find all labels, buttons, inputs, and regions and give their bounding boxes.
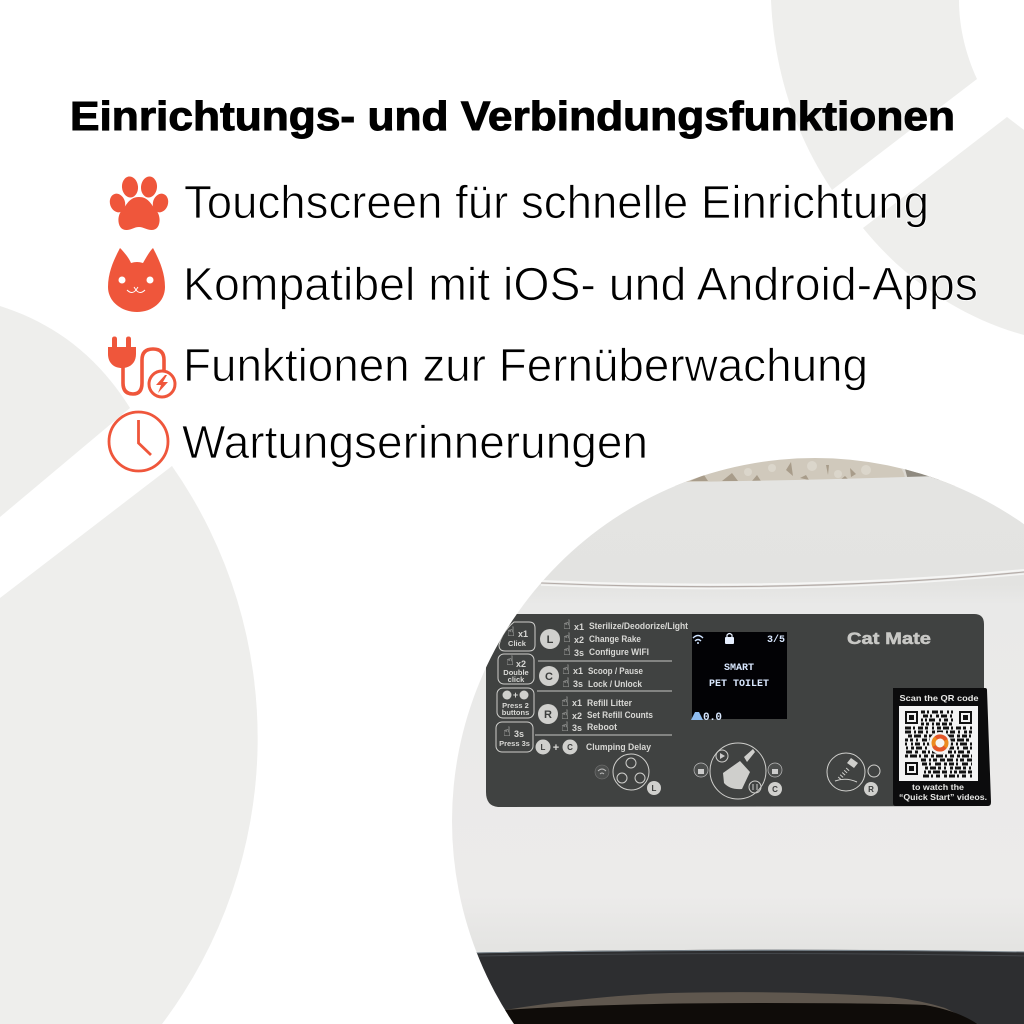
clumping delay row: Clumping Delay	[586, 742, 651, 752]
QR code sticker: to watch the	[912, 782, 964, 792]
button L instructions: L	[547, 634, 554, 646]
button L instructions: ☝	[563, 644, 571, 659]
button R instructions: ☝	[561, 720, 569, 735]
clumping delay row: C	[567, 743, 573, 752]
QR finder squares	[906, 712, 971, 774]
button R instructions: Refill Litter	[587, 698, 632, 708]
mode legend boxes: 3s	[514, 729, 524, 739]
background shape: upper right ring top	[771, 0, 977, 190]
background shape: upper right ring bottom	[863, 117, 1024, 335]
icon: cat face	[108, 248, 165, 312]
mode legend boxes: Press 2	[502, 701, 529, 710]
mode legend boxes: x1	[518, 629, 528, 639]
brand logo: Cat Mate	[847, 629, 931, 648]
right dial icons	[827, 753, 880, 796]
mode legend boxes: Click	[508, 639, 527, 648]
button C instructions: Lock / Unlock	[588, 679, 643, 689]
QR code sticker	[893, 688, 991, 806]
button L instructions: x2	[574, 635, 584, 645]
button R instructions	[538, 696, 653, 731]
LCD screen: SMART	[724, 663, 754, 674]
QR code sticker: “Quick Start” videos.	[899, 792, 987, 802]
clumping delay row: L	[541, 743, 546, 752]
button L instructions: 3s	[574, 648, 584, 658]
button L instructions: Change Rake	[589, 634, 641, 644]
button L instructions: Configure WIFI	[589, 647, 649, 657]
LCD screen	[691, 632, 787, 724]
button R instructions: ☝	[561, 708, 569, 723]
left dial icons: L	[652, 784, 657, 793]
control panel	[486, 614, 991, 807]
button L instructions: ☝	[563, 631, 571, 646]
button L instructions: ☝	[563, 618, 571, 633]
center dial icons	[694, 743, 782, 799]
button L instructions: x1	[574, 622, 584, 632]
mode legend boxes: Double	[503, 668, 529, 677]
button L instructions: Sterilize/Deodorize/Light	[589, 621, 688, 631]
feature text: remote monitoring: Funktionen zur Fernüberwachung	[183, 339, 868, 391]
clumping delay row: +	[553, 742, 559, 754]
dark lower frame	[450, 950, 1024, 1024]
mode legend boxes: x2	[516, 659, 526, 669]
mode legend boxes: +	[513, 690, 518, 700]
button C instructions: x1	[573, 666, 583, 676]
center dial icons: C	[772, 785, 778, 794]
product photo	[440, 450, 1024, 1024]
mode legend boxes: Press 3s	[499, 739, 530, 748]
icon: plug with cord	[108, 336, 175, 397]
feature text: maintenance reminders: Wartungserinnerungen	[182, 416, 648, 468]
button R instructions: x2	[572, 711, 582, 721]
QR center logo	[929, 732, 951, 754]
button C instructions: ☝	[562, 676, 570, 691]
mode legend boxes: ☝	[506, 654, 514, 669]
button R instructions: Set Refill Counts	[587, 710, 653, 720]
button C instructions: 3s	[573, 679, 583, 689]
mode legend boxes: click	[508, 675, 525, 684]
button R instructions: ☝	[561, 695, 569, 710]
button R instructions: R	[544, 709, 552, 721]
button L instructions	[540, 618, 688, 659]
button R instructions: Reboot	[587, 722, 617, 732]
left dial icons	[595, 754, 661, 795]
icon: clock	[109, 412, 168, 471]
button C instructions: Scoop / Pause	[588, 666, 643, 676]
QR modules	[905, 712, 972, 776]
LCD screen: 3/5	[767, 634, 785, 646]
LCD screen: PET TOILET	[709, 679, 769, 690]
button C instructions	[539, 664, 643, 687]
lid seam	[541, 570, 1024, 589]
background shape: lower left circle segment	[0, 466, 258, 1024]
icon: paw	[107, 176, 171, 230]
device body	[440, 476, 1024, 970]
litter in tray	[676, 458, 954, 486]
button R instructions: 3s	[572, 723, 582, 733]
mode legend boxes: ☝	[507, 625, 515, 640]
right dial icons: R	[868, 785, 874, 794]
LCD screen: 0.0	[703, 712, 722, 724]
button C instructions: ☝	[562, 663, 570, 678]
mode legend boxes	[496, 622, 535, 752]
clumping delay row	[536, 740, 651, 754]
mode legend boxes: buttons	[502, 708, 529, 717]
background shape: upper left wedge	[0, 306, 130, 517]
button C instructions: C	[545, 671, 553, 683]
feature text: apps: Kompatibel mit iOS- und Android-Apps	[183, 258, 978, 310]
feature text: touchscreen: Touchscreen für schnelle Einrichtung	[184, 176, 929, 228]
title: Einrichtungs- und Verbindungsfunktionen	[70, 93, 955, 139]
mode legend boxes: ☝	[503, 725, 511, 740]
QR code sticker: Scan the QR code	[900, 693, 979, 703]
button R instructions: x1	[572, 698, 582, 708]
